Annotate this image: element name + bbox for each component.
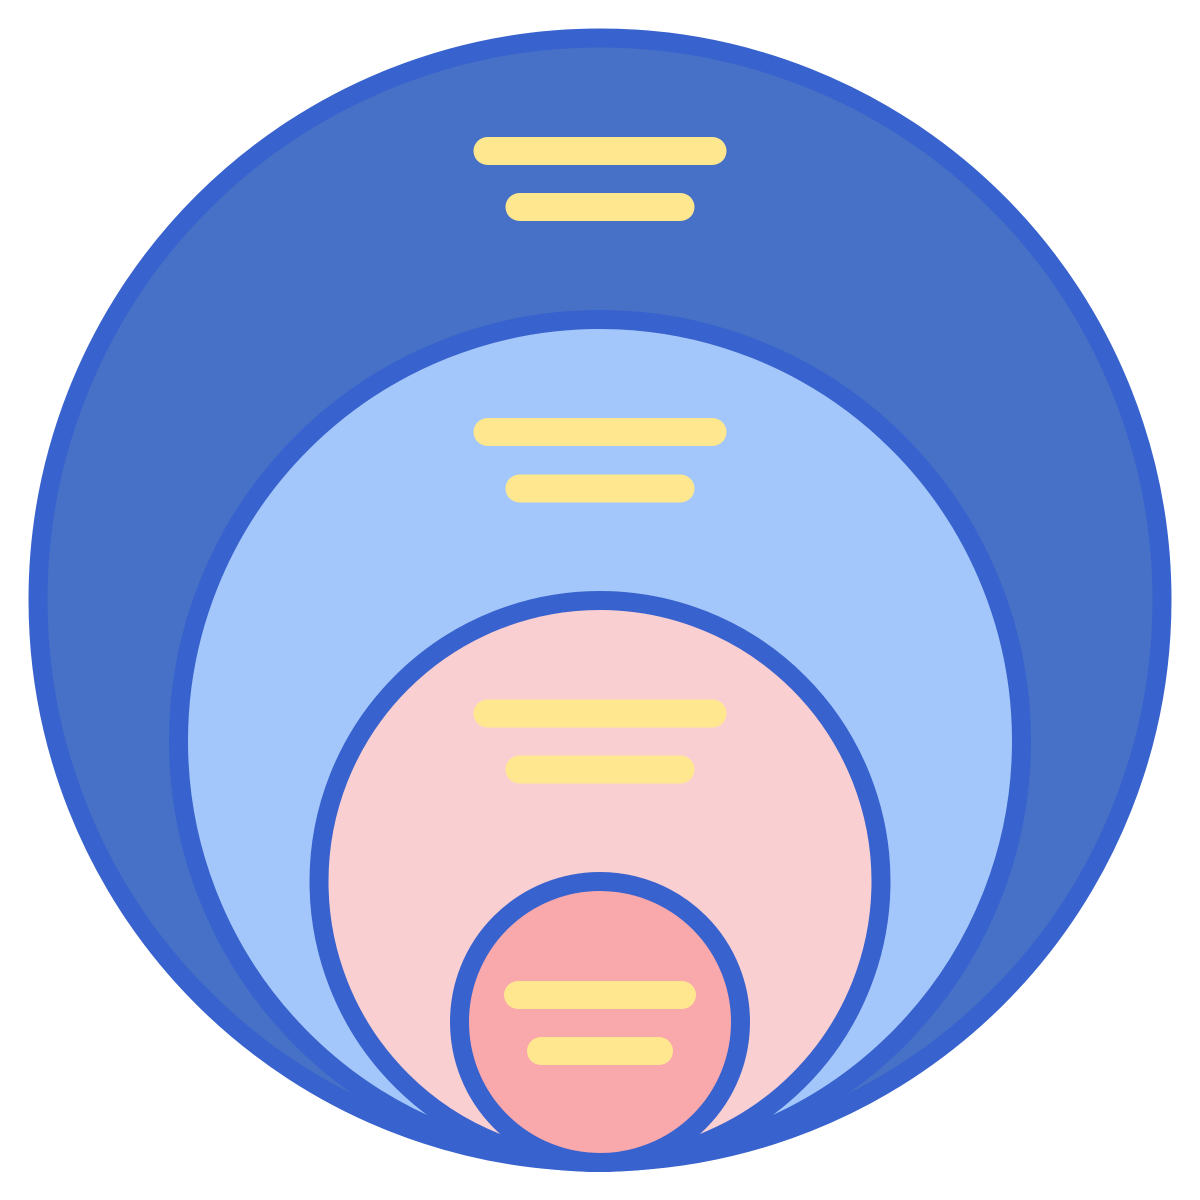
text placeholder: light pink circle [474,700,726,784]
circle 2: light blue [178,320,1022,1162]
circle 3: light pink [319,600,881,1162]
text placeholder: inner circle [504,981,696,1065]
circle 4: inner salmon pink [460,882,740,1162]
text placeholder: outer circle [474,137,726,221]
text placeholder: light blue circle [474,418,726,502]
